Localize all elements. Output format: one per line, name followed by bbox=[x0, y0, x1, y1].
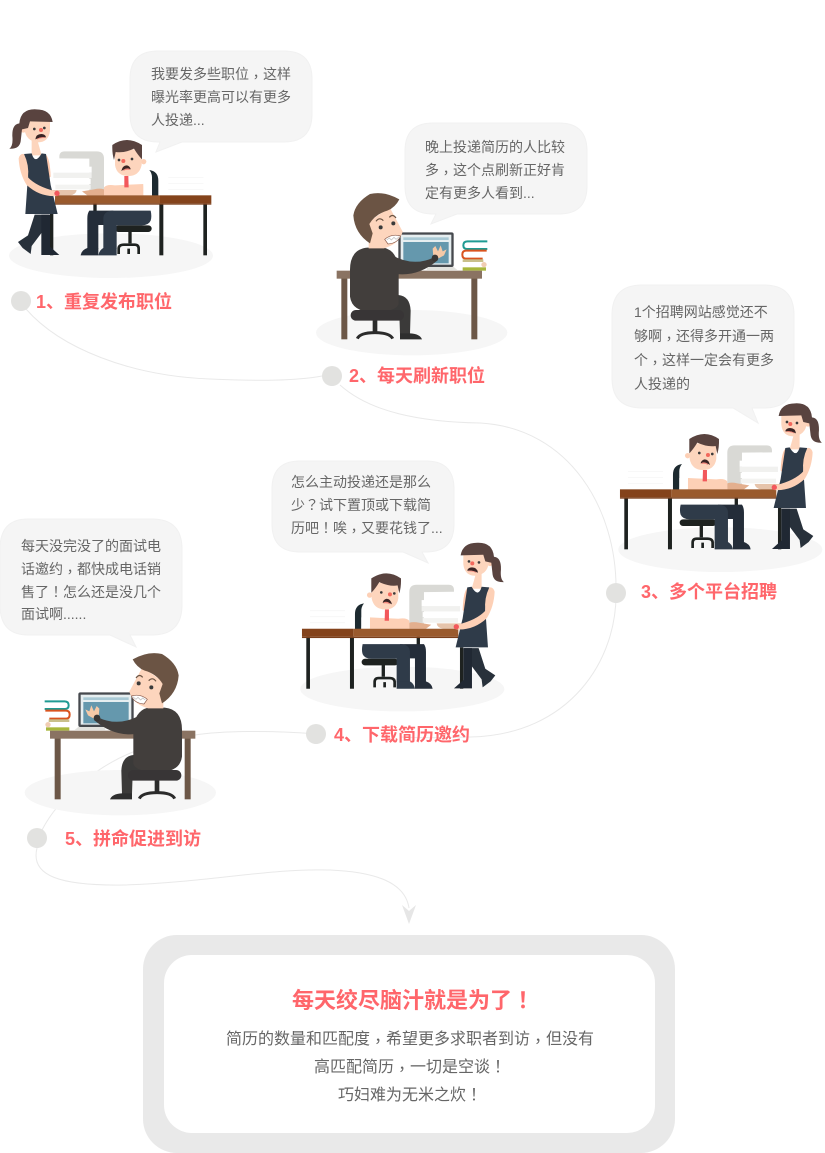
speech bubble 2: 晚上投递简历的人比较 bbox=[425, 139, 565, 155]
step dot 1 bbox=[11, 291, 31, 311]
illustration: man at laptop 2 bbox=[316, 193, 507, 355]
step label 1: 1、重复发布职位 bbox=[36, 291, 172, 312]
illustration: woman and man at desk 1 bbox=[9, 109, 213, 278]
step dot 3 bbox=[606, 583, 626, 603]
step dot 4 bbox=[306, 724, 326, 744]
conclusion heading: 每天绞尽脑汁就是为了！ bbox=[292, 983, 534, 1015]
speech bubble 3: 1个招聘网站感觉还不 bbox=[634, 304, 768, 320]
speech bubble 5: 话邀约，都快成电话销 bbox=[21, 561, 161, 582]
speech bubble 5: 每天没完没了的面试电 bbox=[21, 538, 161, 554]
illustration: man and woman at desk 3 bbox=[618, 403, 822, 572]
speech bubble 2 bbox=[405, 123, 587, 224]
speech bubble 4: 历吧！唉，又要花钱了... bbox=[291, 518, 443, 541]
connecting curve bbox=[26, 309, 616, 908]
speech bubble 4: 怎么主动投递还是那么 bbox=[291, 474, 431, 490]
speech bubble 5: 面试啊...... bbox=[21, 606, 86, 622]
speech bubble 2: 多，这个点刷新正好肯 bbox=[425, 162, 565, 183]
step label 2: 2、每天刷新职位 bbox=[349, 365, 485, 386]
speech bubble 5 bbox=[0, 519, 182, 647]
step label 4: 4、下载简历邀约 bbox=[334, 724, 470, 745]
speech bubble 1 bbox=[130, 51, 312, 152]
speech bubble 5: 售了！怎么还是没几个 bbox=[21, 582, 161, 602]
step label 5: 5、拼命促进到访 bbox=[65, 828, 201, 849]
arrow bbox=[402, 905, 416, 924]
speech bubble 1: 曝光率更高可以有更多 bbox=[151, 89, 291, 105]
illustration: man and woman at desk 4 bbox=[300, 543, 504, 711]
speech bubble 1: 人投递... bbox=[151, 112, 205, 128]
step dot 5 bbox=[27, 828, 47, 848]
conclusion text: 巧妇难为无米之炊！ bbox=[338, 1081, 482, 1105]
speech bubble 4 bbox=[272, 461, 454, 563]
conclusion panel bbox=[143, 935, 675, 1153]
speech bubble 2: 定有更多人看到... bbox=[425, 185, 535, 201]
step label 3: 3、多个平台招聘 bbox=[641, 581, 777, 602]
speech bubble 3: 人投递的 bbox=[634, 376, 690, 392]
speech bubble 3 bbox=[612, 285, 794, 423]
speech bubble 3: 够啊，还得多开通一两 bbox=[634, 328, 774, 349]
conclusion text: 简历的数量和匹配度，希望更多求职者到访，但没有 bbox=[226, 1028, 594, 1052]
speech bubble 3: 个，这样一定会有更多 bbox=[634, 352, 774, 373]
conclusion text bbox=[226, 1028, 594, 1105]
step dot 2 bbox=[322, 366, 342, 386]
speech bubble 4: 少？试下置顶或下载简 bbox=[291, 495, 431, 515]
conclusion text: 高匹配简历，一切是空谈！ bbox=[314, 1053, 506, 1080]
speech bubble 1: 我要发多些职位，这样 bbox=[151, 66, 291, 87]
illustration: man at laptop 5 bbox=[25, 653, 216, 815]
